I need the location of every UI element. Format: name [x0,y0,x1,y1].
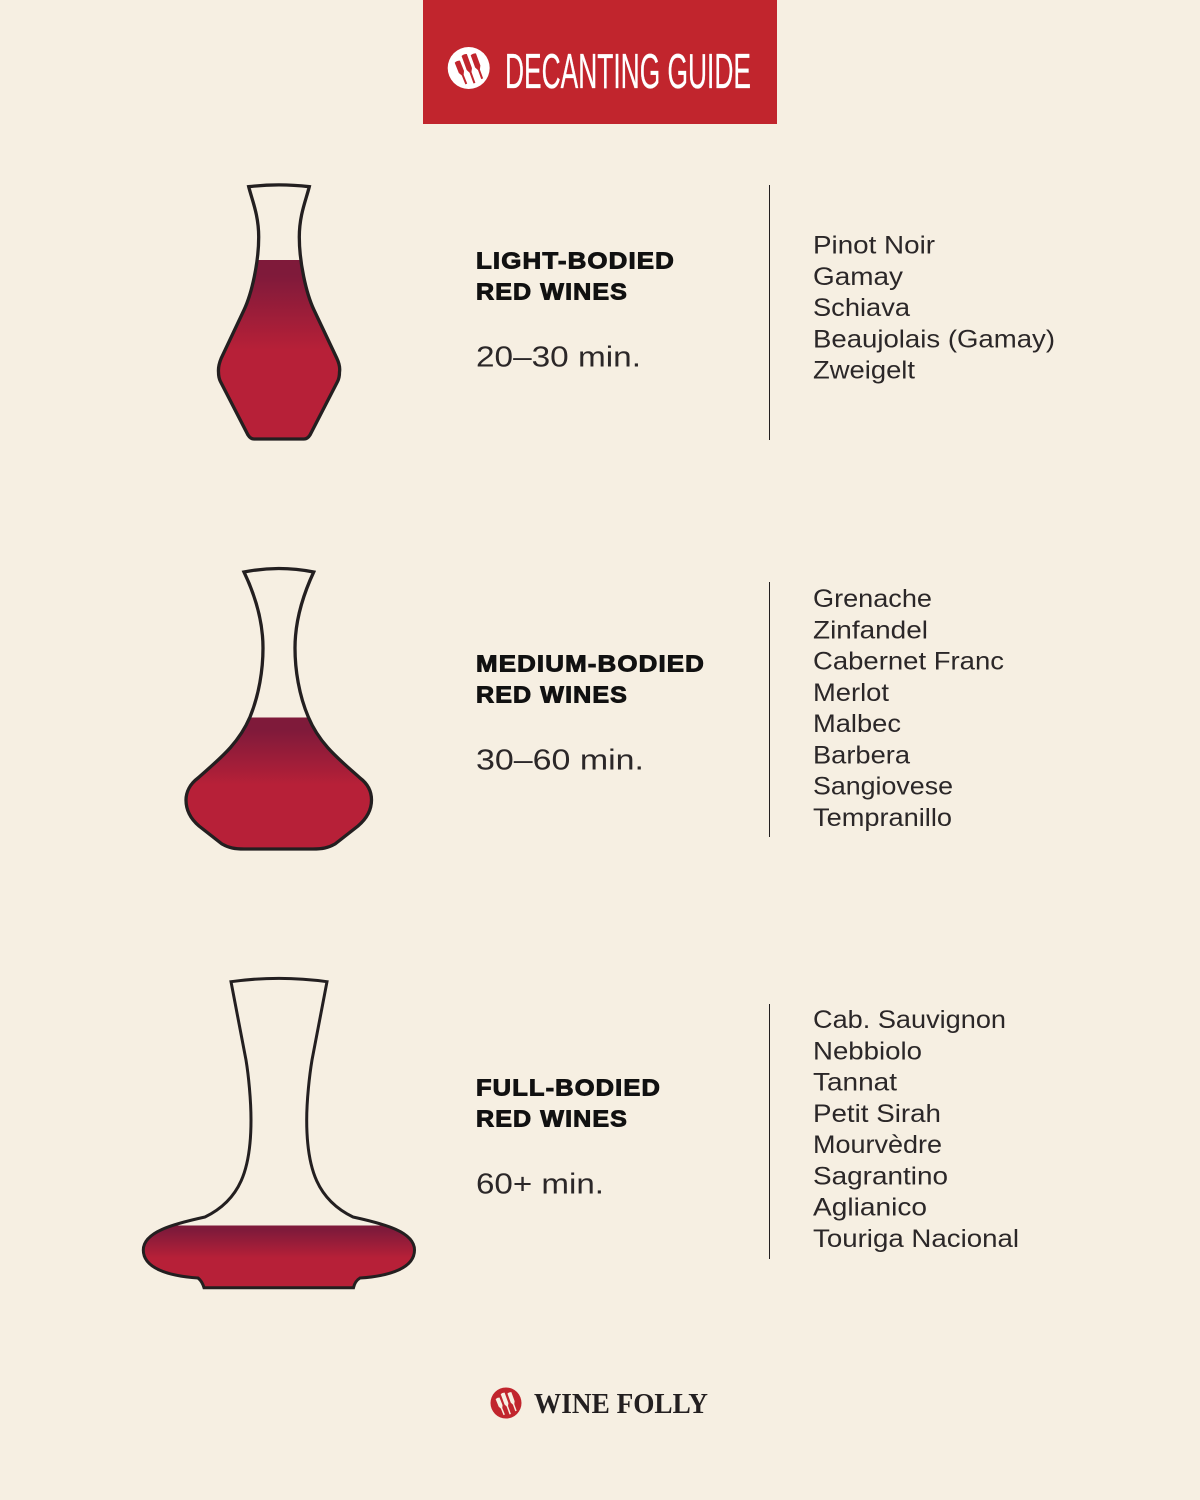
icon: wine folly logo red [490,1388,522,1418]
footer logo [490,1388,708,1420]
wine list: full-bodied: Mourvèdre [813,1131,942,1159]
divider: medium-bodied [769,582,770,837]
wine list: medium-bodied: Barbera [813,741,910,769]
icon: wine folly logo white [448,47,490,89]
heading: light-bodied: RED WINES [476,278,628,304]
wine list: light-bodied: Pinot Noir [813,232,935,260]
wine list: medium-bodied: Tempranillo [813,804,952,832]
wine list: medium-bodied: Cabernet Franc [813,648,1004,676]
wine list: full-bodied: Nebbiolo [813,1037,922,1065]
wine list: medium-bodied: Grenache [813,585,932,613]
decant time: medium-bodied: 30–60 min. [476,744,644,776]
wine list: light-bodied: Gamay [813,263,904,291]
wine list: full-bodied: Petit Sirah [813,1100,941,1128]
decanter: medium-bodied [186,568,372,849]
wine list: full-bodied [813,1006,1019,1253]
title banner [423,0,777,124]
divider: full-bodied [769,1004,770,1259]
wine list: medium-bodied: Malbec [813,710,901,738]
decant time: light-bodied: 20–30 min. [476,342,641,374]
wine list: light-bodied: Schiava [813,294,910,322]
heading: medium-bodied [476,650,705,708]
title text: DECANTING GUIDE [505,45,751,99]
heading: full-bodied [476,1074,661,1132]
wine list: light-bodied: Zweigelt [813,357,915,385]
wine list: full-bodied: Cab. Sauvignon [813,1006,1006,1034]
decant time: full-bodied: 60+ min. [476,1168,604,1200]
wine list: light-bodied: Beaujolais (Gamay) [813,326,1055,354]
heading: full-bodied: RED WINES [476,1106,628,1132]
divider: light-bodied [769,185,770,440]
brand name: WINE FOLLY [534,1389,708,1420]
heading: medium-bodied: MEDIUM-BODIED [476,650,705,676]
decanter: light-bodied [218,185,340,439]
wine list: full-bodied: Touriga Nacional [813,1225,1019,1253]
wine list: light-bodied [813,232,1055,385]
decanter: full-bodied [143,978,415,1288]
heading: light-bodied [476,248,675,304]
heading: full-bodied: FULL-BODIED [476,1074,661,1100]
wine list: full-bodied: Aglianico [813,1194,927,1222]
wine list: medium-bodied: Sangiovese [813,772,953,800]
heading: light-bodied: LIGHT-BODIED [476,248,675,274]
wine list: medium-bodied: Zinfandel [813,616,928,644]
wine list: full-bodied: Sagrantino [813,1162,948,1190]
wine list: medium-bodied: Merlot [813,679,889,707]
wine list: medium-bodied [813,585,1004,832]
wine list: full-bodied: Tannat [813,1068,897,1096]
heading: medium-bodied: RED WINES [476,682,628,708]
